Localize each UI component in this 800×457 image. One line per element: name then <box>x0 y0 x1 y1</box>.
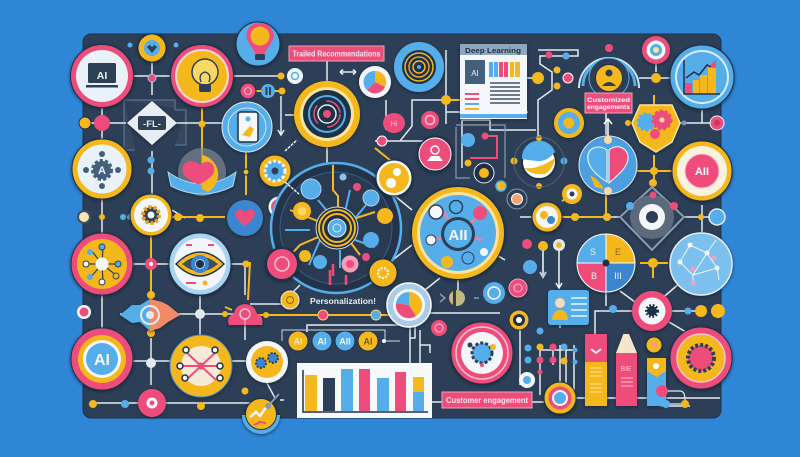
icon: glowing light bulb <box>170 44 234 108</box>
pencil: BiE <box>621 366 632 373</box>
icon: blue card circle <box>222 102 272 152</box>
blue and orange shape <box>120 299 180 331</box>
icon: AI laptop <box>70 44 134 108</box>
arrow: white diagonal <box>285 140 299 194</box>
icon: wave badge <box>514 137 564 187</box>
icon: pink ring <box>431 320 447 336</box>
large personalization circle <box>271 163 401 293</box>
arrow: white down <box>278 96 284 135</box>
panel: FL diamond: -FL- <box>143 119 161 130</box>
icon: pink cloud <box>228 304 262 325</box>
chip AI four: AI <box>364 336 372 346</box>
icon: pale blue circle <box>709 209 725 225</box>
icon: pink dollar circle <box>268 196 290 218</box>
icon: pink swirl node <box>421 111 439 129</box>
icon: flask machine <box>456 125 505 183</box>
circle: AII badge: AII <box>695 166 709 178</box>
pie quadrant chart <box>577 234 635 292</box>
satellite icons in hub <box>429 205 443 219</box>
icon: yellow small coin <box>281 291 299 309</box>
arrow: white up arrow <box>604 119 612 136</box>
icon: yellow blue small gears <box>532 202 562 232</box>
panel: profile ID card <box>548 290 589 325</box>
chip AI three: AII <box>339 336 351 346</box>
label: Customer engagement: Customer engagement <box>446 396 528 405</box>
icon: big pink gear circle <box>670 327 732 389</box>
yellow network circle <box>170 335 232 397</box>
icon: growth chart badge <box>242 394 280 434</box>
icon: yellow people circle <box>376 160 412 196</box>
pink Hi badge <box>383 113 405 133</box>
icon: small pink gear node <box>710 116 724 130</box>
spiral hub <box>316 207 358 249</box>
circle: AII badge <box>672 141 732 201</box>
pink Hi badge: Hi <box>391 121 398 128</box>
icon: pink heart circle <box>227 200 263 236</box>
icon: yellow medal <box>646 337 662 353</box>
satellite nodes <box>301 179 321 199</box>
icon: heart ribbon <box>168 148 236 196</box>
panel: Deep Learning document <box>460 44 527 119</box>
icon: pink gear <box>138 389 166 417</box>
icon: pink user circle <box>417 136 453 172</box>
icon: small white target <box>287 68 303 84</box>
label: Customized engagements: engagements <box>587 105 631 111</box>
icon: yellow ring small <box>509 310 529 330</box>
label: Customer engagement <box>442 392 532 408</box>
icon: blue power node <box>483 282 505 304</box>
pie quadrant chart: III <box>614 271 622 281</box>
bottom right nodes <box>656 385 689 408</box>
icon: white gear badge <box>632 291 672 331</box>
icon: small ring yellow <box>562 184 582 204</box>
panel: FL diamond <box>127 101 177 145</box>
icon: gears A circle <box>72 139 132 199</box>
icon: white gear <box>130 194 172 236</box>
icon: pink small rings <box>509 279 527 297</box>
icon: yellow heart badge <box>138 34 166 62</box>
label: Customized engagements: Customized <box>587 98 630 104</box>
icon: small blue gear <box>259 155 291 187</box>
chip AI two: AI <box>318 336 326 346</box>
icon: hexagon eye lens <box>620 187 684 250</box>
yellow connector lines <box>151 62 672 315</box>
gears circle <box>246 341 288 383</box>
dark background panel <box>83 34 721 418</box>
pie quadrant chart: S <box>590 247 596 257</box>
document heading: Deep Learning <box>465 48 521 55</box>
blue spiral circle <box>394 42 444 92</box>
blue bookmark <box>647 358 666 406</box>
icon: gears in hexagon <box>632 105 680 152</box>
icon: grey half circle <box>440 290 479 306</box>
icon: pink swirl circle <box>265 247 299 281</box>
heading: Personalization: Personalization! <box>310 297 376 306</box>
icon: ring target bottom <box>544 382 576 414</box>
chip AI one: AI <box>294 336 302 346</box>
network circle <box>71 233 133 295</box>
pencil <box>616 327 637 406</box>
AI blue circle: AI <box>94 352 110 369</box>
icon: pink and blue small nodes <box>240 83 286 99</box>
network globe circle <box>670 233 732 295</box>
bar and line chart circle <box>670 45 734 109</box>
arrow: double arrow <box>340 70 356 74</box>
label: Trailed Recommendations: Trailed Recommendations <box>292 50 381 58</box>
bookmark yellow and pink <box>585 334 607 406</box>
pie chart circle <box>359 66 391 98</box>
icon: small ring peach <box>507 189 527 209</box>
arrow: grey down <box>540 250 546 277</box>
icon: customer with rings <box>579 58 639 98</box>
icon: yellow gear node <box>369 259 397 287</box>
connector lines <box>85 50 720 406</box>
icon: top light bulb <box>236 22 280 66</box>
big AI hub circle <box>412 186 504 280</box>
icon: hearts in blue circle <box>579 136 637 195</box>
pie quadrant chart: B <box>591 271 597 281</box>
AI blue circle <box>71 328 133 390</box>
AI chips row <box>282 330 400 351</box>
icon: yellow ring target <box>554 108 584 138</box>
bar chart <box>297 363 432 418</box>
label: Customized engagements <box>585 93 632 113</box>
frame around FL diamond <box>124 100 186 150</box>
icon: pink large cluster circle <box>451 322 513 384</box>
pie quadrant chart: E <box>615 247 621 257</box>
icon: pie ring <box>387 283 431 327</box>
label: Trailed Recommendations <box>289 46 384 61</box>
icon: gears A circle: A <box>98 165 106 177</box>
arrow: white into card <box>556 250 562 288</box>
node dots <box>78 42 725 410</box>
AI document label: AI <box>471 69 479 78</box>
target rings circle <box>294 81 360 147</box>
nodes: left pink and yellow <box>79 115 110 131</box>
icon: pink top target <box>642 36 670 64</box>
icon: pink left dot <box>77 305 91 319</box>
AI label on laptop: AI <box>97 70 107 82</box>
big AI hub circle: AII <box>448 227 468 244</box>
eye circle <box>169 233 231 295</box>
